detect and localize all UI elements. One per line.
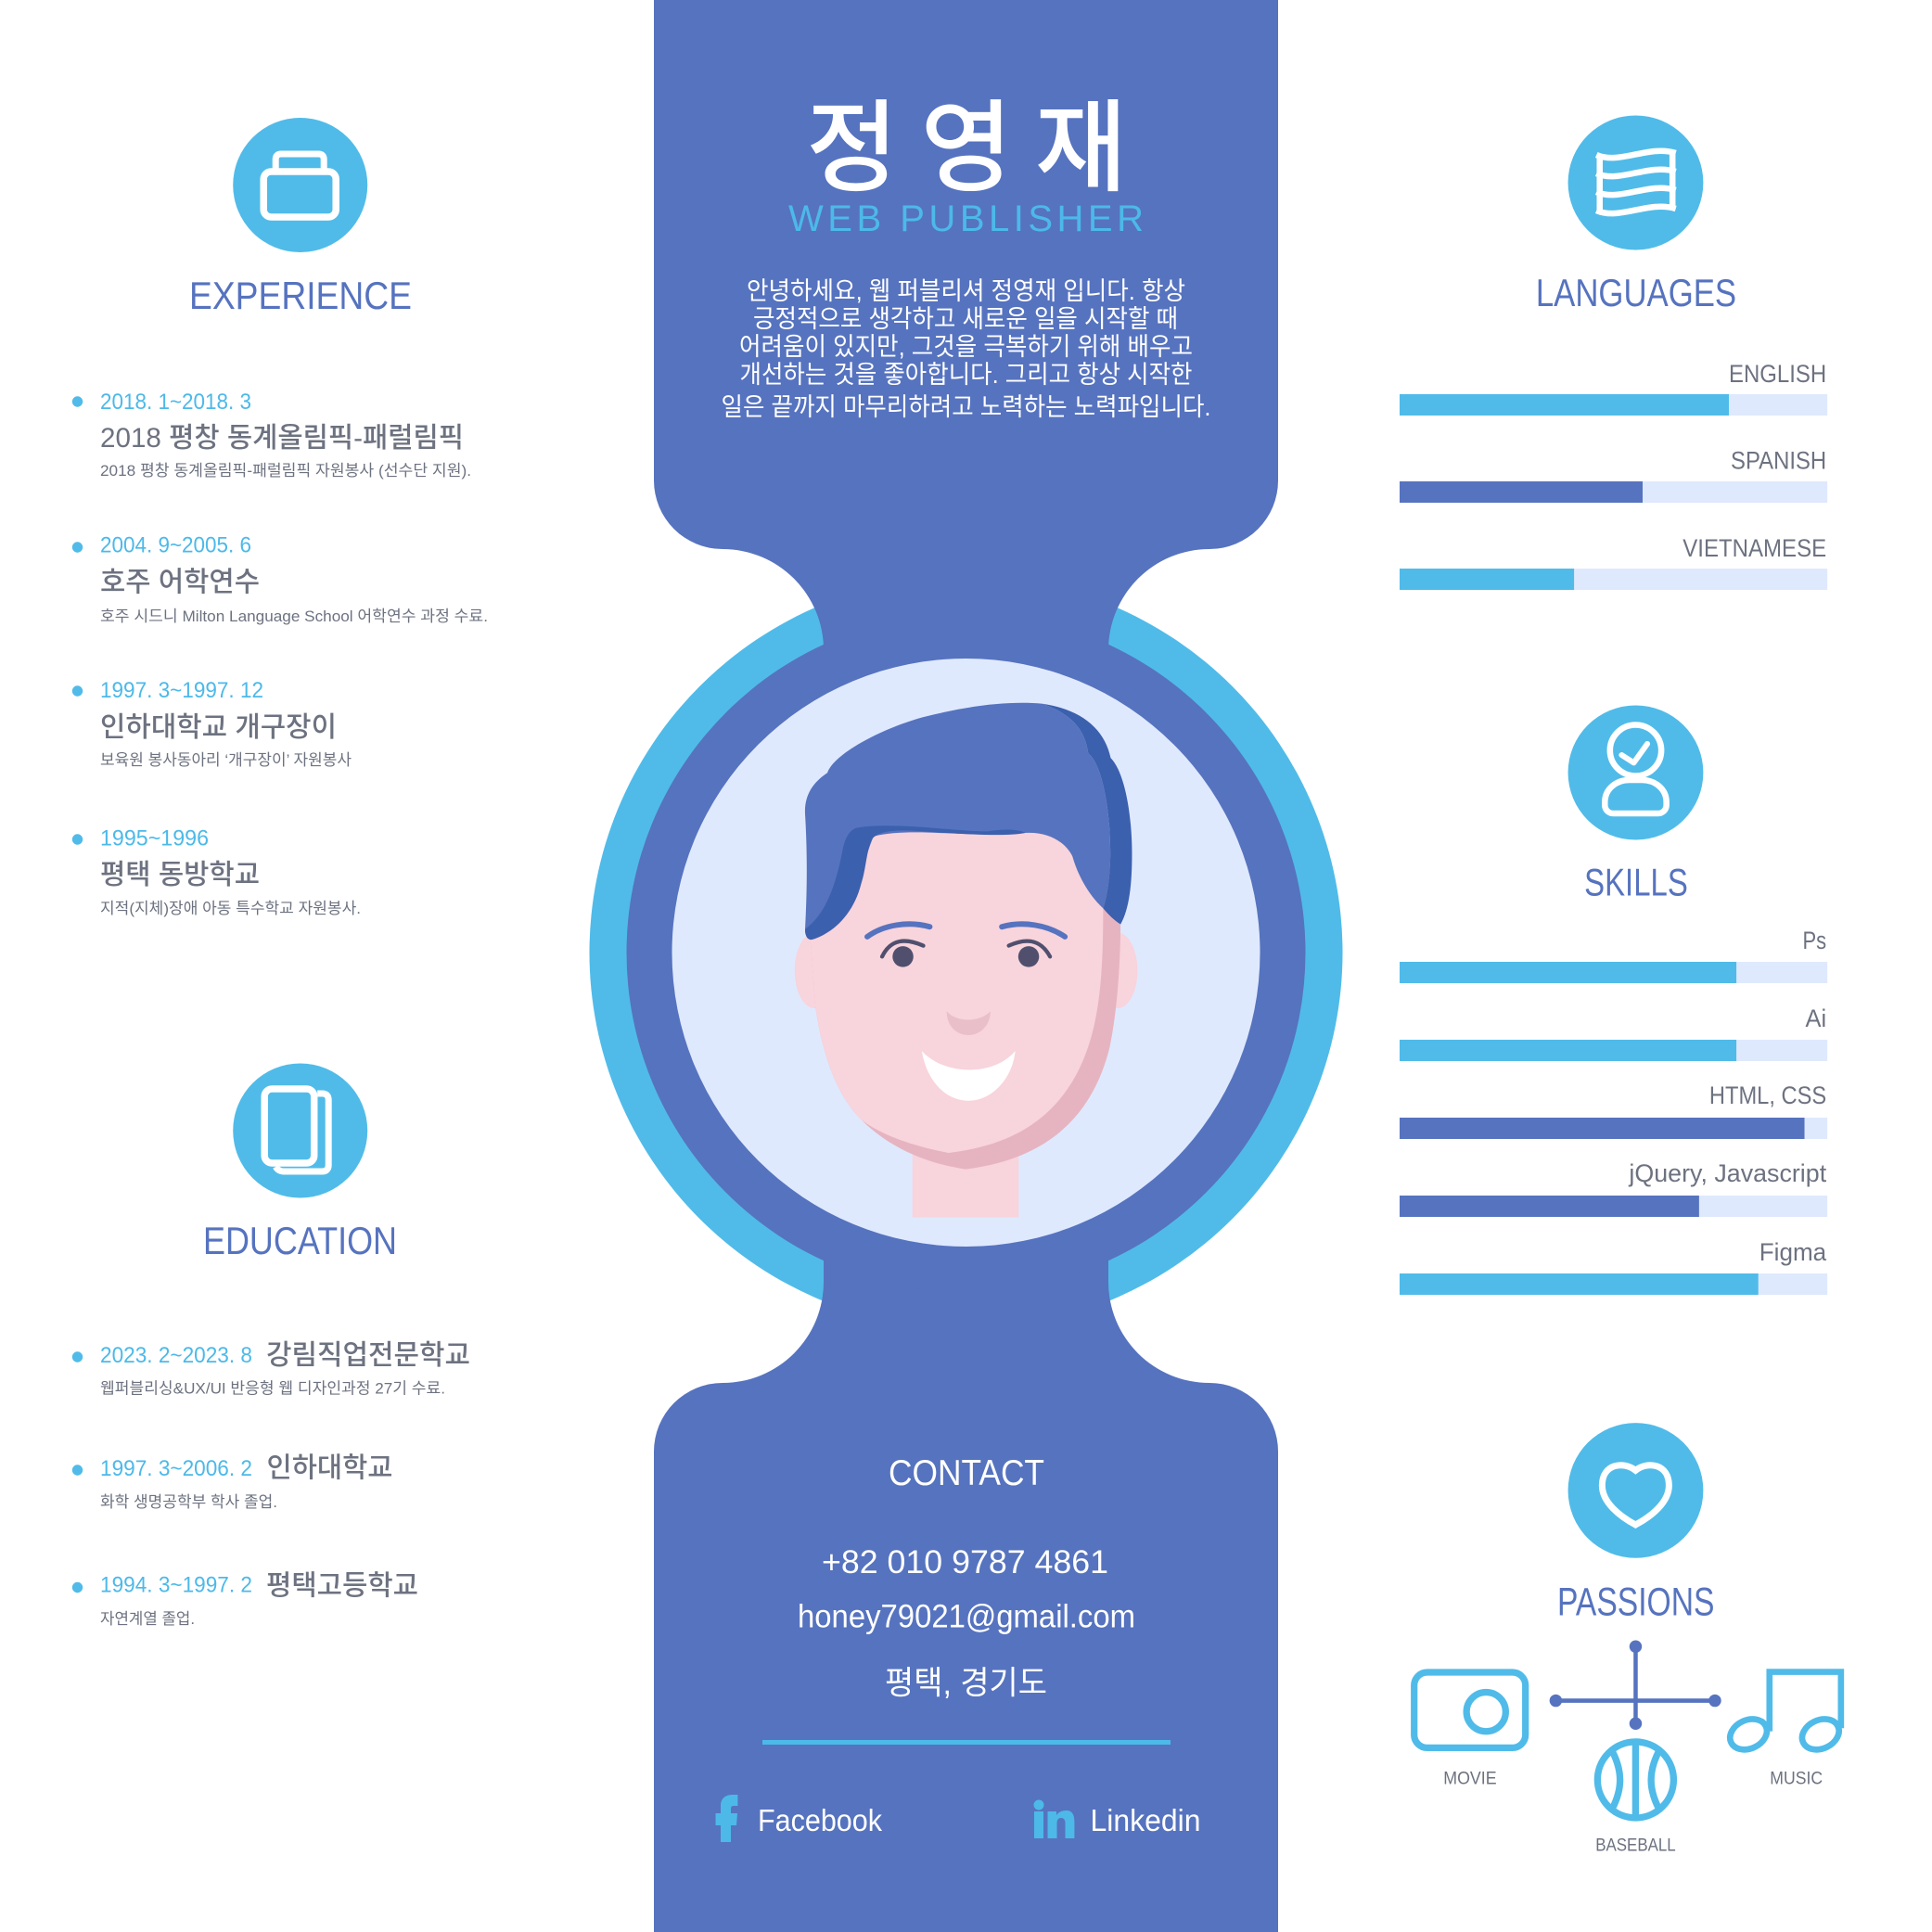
bar: vietnamese — [1400, 533, 1827, 590]
heading: education: EDUCATION — [203, 1219, 397, 1262]
icon: linkedin — [1033, 1799, 1074, 1838]
education item 1: 2023. 2~2023. 8 — [100, 1343, 252, 1368]
heading: languages: LANGUAGES — [1536, 271, 1736, 314]
education item 1: 웹퍼블리싱&UX/UI 반응형 웹 디자인과정 27기 수료. — [100, 1380, 445, 1397]
bar: illustrator: Ai — [1806, 1004, 1826, 1032]
bar: illustrator — [1400, 1004, 1827, 1061]
bar: figma: Figma — [1759, 1237, 1827, 1266]
man's face and hair — [795, 703, 1137, 1218]
portrait ring: outer cyan circle — [590, 576, 1343, 1329]
experience item 4 — [72, 825, 361, 917]
label: baseball: BASEBALL — [1595, 1836, 1676, 1855]
education item 1 — [72, 1340, 470, 1397]
divider — [762, 1740, 1171, 1745]
bar: photoshop: Ps — [1803, 926, 1826, 954]
subtitle: web publisher: WEB PUBLISHER — [788, 198, 1144, 239]
experience item 3: 보육원 봉사동아리 ‘개구장이’ 자원봉사 — [100, 751, 352, 769]
intro paragraph: 일은 끝까지 마무리하려고 노력하는 노력파입니다. — [722, 393, 1211, 421]
experience item 3: 1997. 3~1997. 12 — [100, 678, 263, 703]
bar: html css: HTML, CSS — [1709, 1081, 1826, 1109]
experience item 4: 1995~1996 — [100, 825, 209, 851]
panel: skills — [1400, 705, 1827, 1295]
experience item 1: 2018 평창 동계올림픽-패럴림픽 — [100, 423, 464, 454]
experience item 2: 호주 어학연수 — [100, 568, 260, 597]
heading: passions: PASSIONS — [1557, 1580, 1714, 1624]
bar: english — [1400, 359, 1827, 416]
label: movie: MOVIE — [1443, 1770, 1497, 1789]
bar: figma — [1400, 1237, 1827, 1295]
education item 2 — [72, 1452, 393, 1511]
icon: documents — [233, 1063, 367, 1198]
intro paragraph: 어려움이 있지만, 그것을 극복하기 위해 배우고 — [739, 333, 1193, 361]
email address: honey79021@gmail.com — [798, 1599, 1135, 1634]
title: name: 정 영 재 — [806, 92, 1127, 204]
panel: education — [72, 1063, 470, 1628]
icon: person with check — [1568, 705, 1703, 840]
portrait ring: inner blue circle — [627, 613, 1306, 1292]
icon: ball — [1597, 1742, 1673, 1818]
experience item 4: 평택 동방학교 — [100, 860, 260, 890]
icon: briefcase — [233, 118, 367, 252]
portrait: avatar illustration — [672, 659, 1260, 1247]
icon: music notes — [1725, 1672, 1844, 1756]
intro paragraph: 안녕하세요, 웹 퍼블리셔 정영재 입니다. 항상 — [747, 277, 1185, 305]
icon: flag — [1568, 115, 1703, 250]
experience item 2 — [72, 532, 488, 625]
experience item 1 — [72, 390, 471, 480]
bar: html css — [1400, 1081, 1827, 1139]
education item 2: 인하대학교 — [267, 1452, 393, 1484]
linkedin label: Linkedin — [1091, 1803, 1200, 1837]
education item 2: 화학 생명공학부 학사 졸업. — [100, 1493, 277, 1511]
contact block — [716, 1453, 1200, 1842]
experience item 2: 호주 시드니 Milton Language School 어학연수 과정 수료. — [100, 608, 488, 625]
heading: contact: CONTACT — [889, 1453, 1044, 1493]
location: 평택, 경기도 — [885, 1666, 1047, 1701]
heading: skills: SKILLS — [1584, 861, 1688, 903]
central panel: blue column with neck — [654, 0, 1278, 1932]
bar: jquery javascript: jQuery, Javascript — [1628, 1158, 1827, 1187]
bar: spanish — [1400, 446, 1827, 503]
bar: spanish: SPANISH — [1731, 446, 1826, 474]
portrait background circle — [672, 659, 1260, 1247]
intro paragraph: 개선하는 것을 좋아합니다. 그리고 항상 시작한 — [740, 361, 1193, 389]
intro paragraph: 긍정적으로 생각하고 새로운 일을 시작할 때 — [753, 305, 1178, 333]
experience item 2: 2004. 9~2005. 6 — [100, 532, 251, 558]
experience item 3: 인하대학교 개구장이 — [100, 712, 337, 743]
experience item 1: 2018 평창 동계올림픽-패럴림픽 자원봉사 (선수단 지원). — [100, 462, 471, 480]
experience item 4: 지적(지체)장애 아동 특수학교 자원봉사. — [100, 900, 361, 917]
icon: facebook — [716, 1795, 737, 1842]
panel: experience — [72, 118, 488, 917]
bar: jquery javascript — [1400, 1158, 1827, 1217]
connector cross — [1550, 1641, 1721, 1730]
bar: english: ENGLISH — [1729, 359, 1826, 388]
panel: passions — [1414, 1423, 1844, 1855]
panel: languages — [1400, 115, 1827, 590]
experience item 1: 2018. 1~2018. 3 — [100, 390, 251, 415]
bar: photoshop — [1400, 926, 1827, 983]
education item 2: 1997. 3~2006. 2 — [100, 1456, 252, 1481]
intro paragraph — [722, 277, 1211, 421]
education item 3: 자연계열 졸업. — [100, 1610, 195, 1628]
education item 3: 1994. 3~1997. 2 — [100, 1573, 252, 1597]
icon: heart — [1568, 1423, 1703, 1558]
heading: experience: EXPERIENCE — [189, 274, 412, 317]
education item 3 — [72, 1571, 418, 1628]
education item 1: 강림직업전문학교 — [266, 1340, 470, 1371]
icon: movie camera — [1414, 1672, 1526, 1747]
experience item 3 — [72, 678, 352, 769]
label: music: MUSIC — [1770, 1770, 1823, 1789]
bar: vietnamese: VIETNAMESE — [1683, 533, 1826, 562]
facebook label: Facebook — [758, 1803, 882, 1837]
education item 3: 평택고등학교 — [266, 1571, 418, 1601]
phone number: +82 010 9787 4861 — [822, 1544, 1108, 1580]
